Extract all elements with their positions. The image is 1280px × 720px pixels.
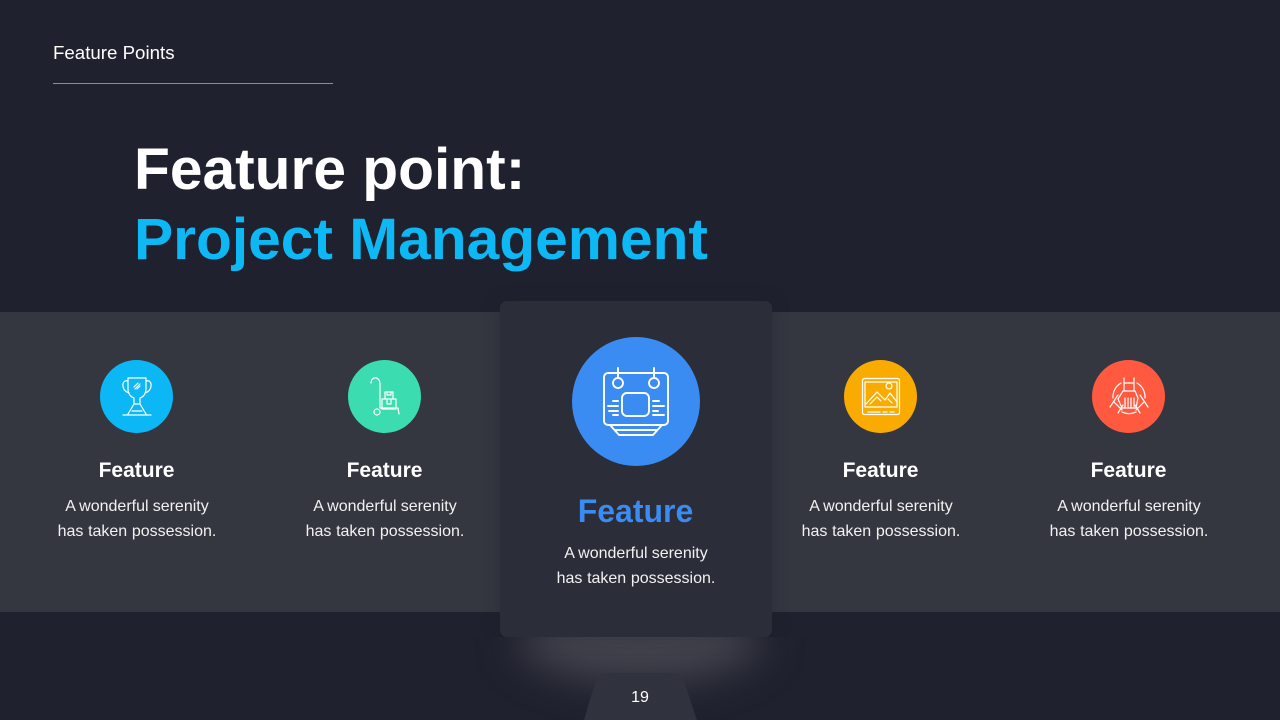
description: has taken possession. <box>1050 523 1208 540</box>
description: A wonderful serenity <box>313 498 457 515</box>
title <box>134 137 708 272</box>
description: A wonderful serenity <box>65 498 209 515</box>
description: A wonderful serenity <box>809 498 953 515</box>
feature 5 <box>1050 360 1208 540</box>
feature 1 <box>58 360 216 540</box>
icon: trophy <box>100 360 173 433</box>
description <box>1050 498 1208 540</box>
header label: Feature Points <box>53 42 175 63</box>
description: has taken possession. <box>557 570 715 587</box>
description <box>802 498 960 540</box>
icon: calendar <box>572 337 700 466</box>
icon: joined hands <box>1092 360 1165 433</box>
heading: Feature <box>1091 459 1166 482</box>
description: A wonderful serenity <box>1057 498 1201 515</box>
glow under card <box>513 637 768 692</box>
heading: Feature <box>578 493 693 529</box>
title: Feature point: <box>134 137 525 202</box>
description <box>557 545 715 587</box>
description: has taken possession. <box>306 523 464 540</box>
description: A wonderful serenity <box>564 545 708 562</box>
highlighted card <box>500 301 772 637</box>
description <box>306 498 464 540</box>
heading: Feature <box>843 459 918 482</box>
description <box>58 498 216 540</box>
heading: Feature <box>99 459 174 482</box>
icon: picture frame <box>844 360 917 433</box>
feature 2 <box>306 360 464 540</box>
page number: 19 <box>631 689 649 706</box>
page number tab <box>584 690 697 720</box>
heading: Feature <box>347 459 422 482</box>
icon: hand truck <box>348 360 421 433</box>
feature 4 <box>802 360 960 540</box>
feature band <box>0 312 1280 612</box>
title: Project Management <box>134 207 708 272</box>
description: has taken possession. <box>58 523 216 540</box>
description: has taken possession. <box>802 523 960 540</box>
